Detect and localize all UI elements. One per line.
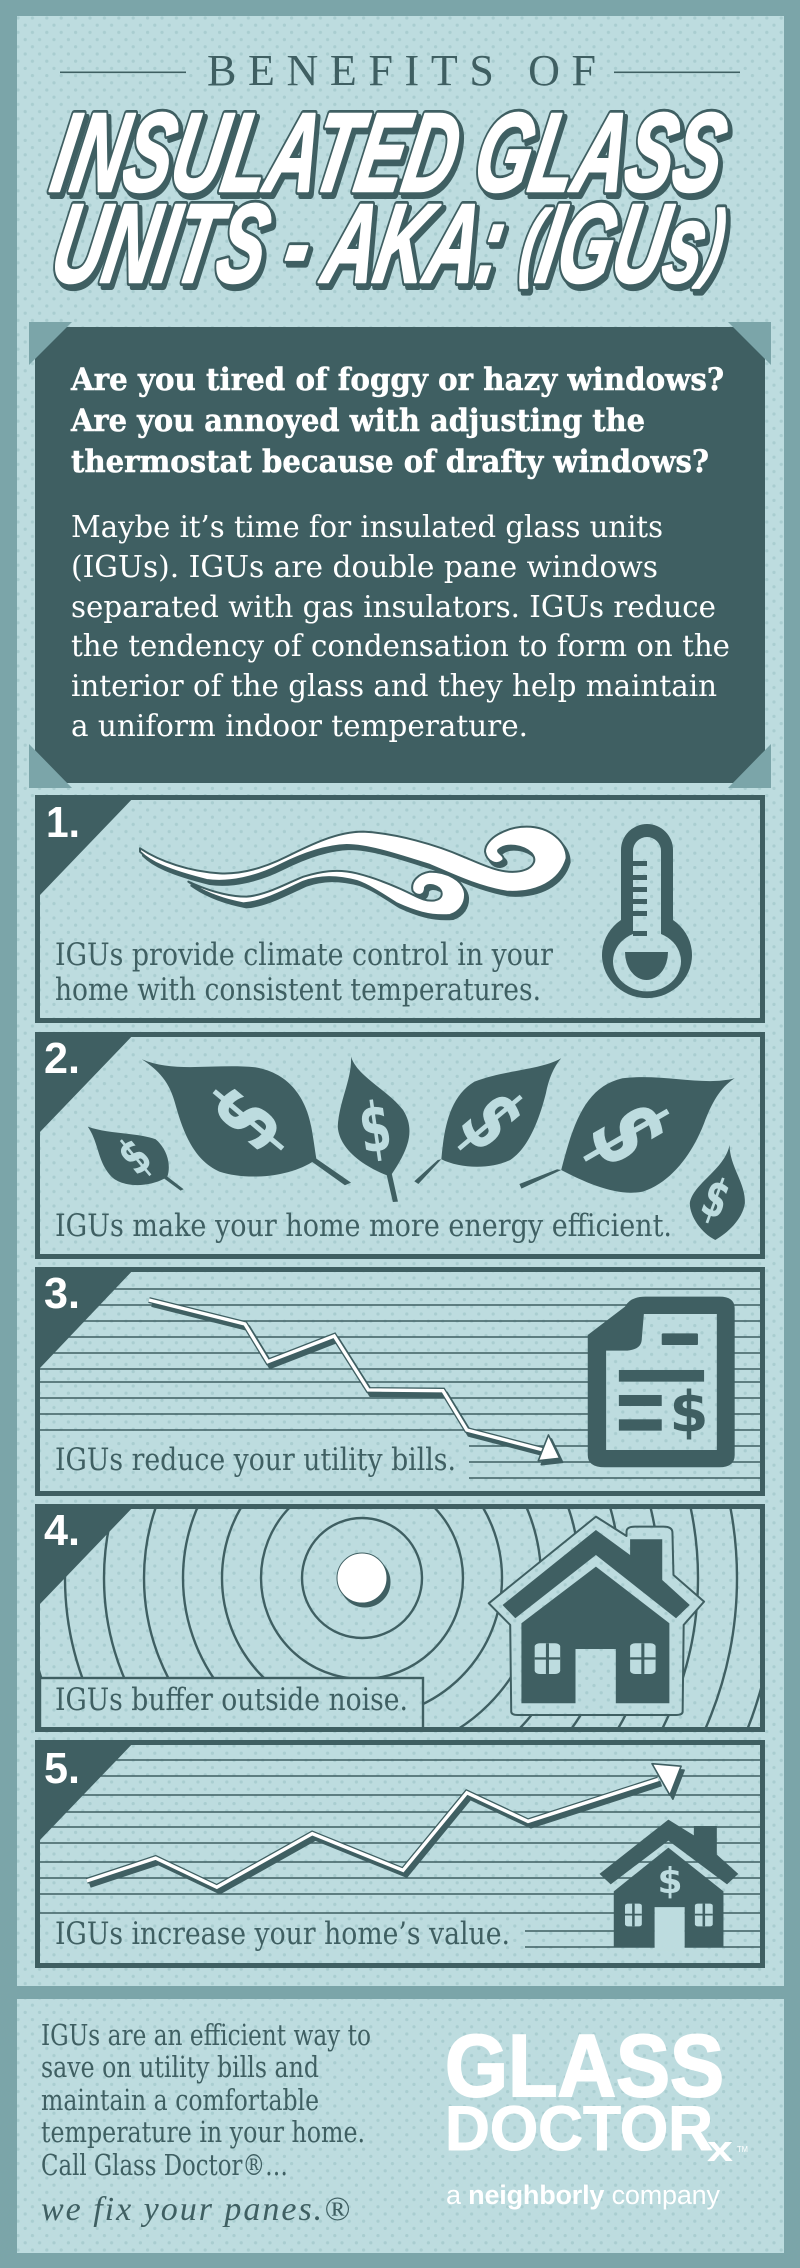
panel 2: energy efficient [35, 1032, 762, 1256]
number badge 1 [35, 795, 136, 902]
title: ( [514, 194, 556, 289]
footer text: IGUs are an efficient way to [41, 2019, 371, 2052]
footer text [41, 2019, 371, 2182]
number badge 4 [35, 1504, 136, 1611]
title [43, 90, 736, 306]
title: UNITS - AKA: [43, 181, 779, 306]
ribbon corners [29, 322, 771, 788]
panel 5: home value [35, 1740, 762, 1966]
intro body text: separated with gas insulators. IGUs reduce [71, 590, 716, 625]
logo: Glass Doctor: DOCTOR [445, 2094, 713, 2164]
footer text: save on utility bills and [41, 2051, 319, 2084]
icon: bill document [588, 1297, 735, 1467]
number badge 5 [35, 1740, 136, 1847]
footer text: temperature in your home. [41, 2116, 365, 2149]
text: climate control: IGUs provide climate control in your [55, 938, 553, 973]
logo: Glass Doctor: x [707, 2128, 733, 2169]
icon: dollar leaves [88, 1057, 745, 1240]
intro question text: Are you tired of foggy or hazy windows? [70, 362, 724, 398]
panel 4: outside noise [35, 1504, 765, 1732]
chart: rising line with arrow [87, 1764, 681, 1887]
logo: Glass Doctor: TM [737, 2145, 748, 2154]
number badge 1: 1. [46, 798, 80, 847]
intro question text: Are you annoyed with adjusting the [70, 403, 645, 439]
heading: benefits of: BENEFITS OF [207, 46, 596, 95]
icon: dollar leaves: $ [440, 1071, 546, 1169]
icon: house with dollar [599, 1820, 738, 1951]
panel: footer [17, 1999, 784, 2253]
icon: dollar leaves: $ [354, 1087, 396, 1170]
number badge 5: 5. [44, 1744, 80, 1793]
number badge 4: 4. [44, 1506, 80, 1555]
intro body text: a uniform indoor temperature. [71, 709, 528, 744]
number badge 3: 3. [44, 1269, 80, 1318]
panel 1: climate control [35, 795, 762, 1020]
sound rings [40, 1509, 760, 1727]
title: ) [692, 194, 733, 289]
tagline: we fix your panes.® [41, 2191, 350, 2228]
chart: falling line with arrow [149, 1300, 560, 1461]
logo: Glass Doctor [445, 2016, 748, 2210]
intro body text: the tendency of condensation to form on the [71, 629, 730, 664]
icon: house with outline [489, 1517, 704, 1715]
panel: intro box [29, 322, 771, 788]
chart grid lines [40, 1760, 761, 1947]
logo: Glass Doctor: GLASS [445, 2016, 724, 2115]
icon: dollar leaves: $ [694, 1166, 737, 1232]
text: home value: IGUs increase your home’s value. [55, 1917, 510, 1952]
icon: dollar leaves: $ [563, 1082, 694, 1185]
icon: dollar leaves: $ [187, 1064, 304, 1171]
intro body text [71, 510, 730, 744]
logo: Glass Doctor: a neighborly company [446, 2180, 720, 2210]
footer text: maintain a comfortable [41, 2084, 319, 2117]
intro question text: thermostat because of drafty windows? [71, 444, 709, 480]
sound source dot [337, 1553, 387, 1603]
icon: house with dollar: $ [657, 1861, 683, 1902]
panel 3: utility bills [35, 1267, 762, 1494]
title: ) [692, 194, 733, 289]
number badge 2 [35, 1032, 136, 1139]
title: UNITS - AKA: [43, 181, 779, 306]
number badge 2: 2. [44, 1034, 80, 1083]
icon: dollar leaves: $ [107, 1127, 163, 1187]
number badge 3 [35, 1267, 136, 1374]
icon: wind swirls [140, 827, 567, 915]
title: ( [514, 194, 556, 289]
footer text: Call Glass Doctor®… [41, 2149, 288, 2182]
intro body text: Maybe it’s time for insulated glass units [71, 510, 663, 545]
icon: thermometer [602, 824, 692, 998]
icon: bill document: $ [670, 1380, 708, 1445]
text: utility bills: IGUs reduce your utility bills. [55, 1443, 456, 1478]
chart grid lines [40, 1289, 761, 1478]
text: climate control [55, 938, 553, 1008]
text label: buffer noise: IGUs buffer outside noise. [55, 1683, 408, 1718]
intro body text: interior of the glass and they help maintain [71, 669, 717, 704]
text: energy efficient: IGUs make your home more energy efficient. [55, 1209, 672, 1244]
text label: buffer noise [40, 1678, 423, 1730]
text: climate control: home with consistent temperatures. [55, 973, 541, 1008]
intro body text: (IGUs). IGUs are double pane windows [71, 550, 658, 585]
intro question text [70, 362, 724, 480]
